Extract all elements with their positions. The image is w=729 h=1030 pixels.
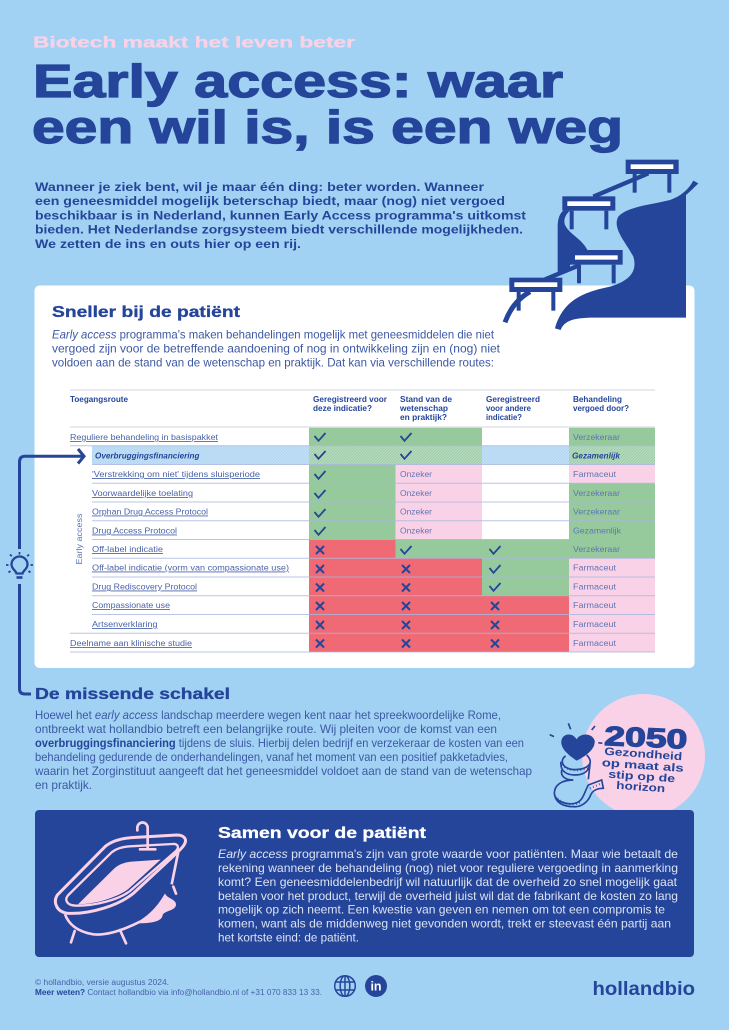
route names: Off-label indicatie (vorm van compassionate use) xyxy=(92,562,289,572)
intro text: bieden. Het Nederlandse zorgsysteem biedt verschillende mogelijkheden. xyxy=(35,222,523,236)
reimbursed-by labels: Verzekeraar xyxy=(573,506,620,516)
uncertain labels: Onzeker xyxy=(400,469,432,479)
footer text xyxy=(35,978,322,997)
footer text: Meer weten? Contact hollandbio via info@hollandbio.nl of +31 070 833 13 33. xyxy=(35,988,322,997)
reimbursed-by labels: Farmaceut xyxy=(573,562,617,572)
callout caption: stip op de xyxy=(608,769,676,785)
early access vertical label: Early access xyxy=(74,513,84,565)
icon: lightbulb xyxy=(6,552,33,578)
samen text: het kortste eind: de patiënt. xyxy=(218,932,359,944)
reimbursed-by labels: Gezamenlijk xyxy=(572,450,621,460)
reimbursed-by labels: Farmaceut xyxy=(573,582,617,592)
pink circle callout: 2050 xyxy=(582,694,705,817)
logo: hollandbio: hollandbio xyxy=(592,979,695,1000)
intro text: een geneesmiddel mogelijk beterschap biedt, maar (nog) niet vergoed xyxy=(35,194,505,208)
footer text: © hollandbio, versie augustus 2024. xyxy=(35,978,169,987)
panel intro text xyxy=(52,328,501,370)
table header: indicatie? xyxy=(486,412,522,422)
title xyxy=(32,55,623,153)
icon: heart with measuring tape xyxy=(550,723,603,807)
route names: Overbruggingsfinanciering xyxy=(95,450,200,460)
callout caption: Gezondheid xyxy=(604,746,683,763)
reimbursed-by labels: Verzekeraar xyxy=(573,432,620,442)
table header xyxy=(70,394,629,422)
route names: Artsenverklaring xyxy=(92,619,158,629)
uncertain labels: Onzeker xyxy=(400,488,432,498)
samen text: komen, want als de middenweg niet gevonden wordt, trekt er steevast één partij aan xyxy=(218,918,671,930)
missende schakel text: Hoewel het early access landschap meerdere wegen kent naar het spreekwoordelijke Rome, xyxy=(35,709,501,722)
route names: 'Verstrekking om niet' tijdens sluisperiode xyxy=(92,469,260,479)
panel intro text: Early access programma's maken behandelingen mogelijk met geneesmiddelen die niet xyxy=(52,328,495,342)
samen text: mogelijk op zich neemt. Een kwestie van geven en nemen om tot een compromis te xyxy=(218,904,665,916)
uncertain labels xyxy=(400,469,432,536)
samen text xyxy=(218,848,678,944)
icon: globe xyxy=(335,976,355,996)
samen text: betalen voor het product, terwijl de overheid juist wil dat de fabrikant de kosten zo lang xyxy=(218,890,678,903)
table header: Stand van de xyxy=(400,394,452,404)
arrow: link line to missende schakel xyxy=(20,584,31,694)
missende schakel text: en praktijk. xyxy=(35,779,92,792)
heading: sneller bij de patiënt: Sneller bij de patiënt xyxy=(52,304,240,321)
reimbursed-by labels: Farmaceut xyxy=(573,469,617,479)
samen text: komt? Een geneesmiddelenbedrijf wil natuurlijk dat de overheid zo snel mogelijk gaat xyxy=(218,876,678,889)
panel intro text: vergoed zijn voor de betreffende aandoening of nog in ontwikkeling zijn en (nog) niet xyxy=(52,342,501,356)
table header: Geregistreerd xyxy=(486,394,540,404)
missende schakel text: behandeling gedurende de onderhandelingen, vanaf het moment van een positief pakketadvies, xyxy=(35,751,508,764)
callout caption: op maat als xyxy=(601,757,684,775)
intro text: Wanneer je ziek bent, wil je maar één ding: beter worden. Wanneer xyxy=(35,180,484,194)
title: Early access: waar xyxy=(33,55,563,107)
panel intro text: voldoen aan de stand van de wetenschap en praktijk. Dat kan via verschillende routes: xyxy=(52,356,494,370)
arrow: link line to table row xyxy=(20,449,84,549)
table header: vergoed door? xyxy=(573,403,629,413)
missende schakel text: waarin het Zorginstituut aangeeft dat het geneesmiddel voldoet aan de stand van de wetenschap xyxy=(34,765,532,778)
samen text: Early access programma's zijn van grote waarde voor patiënten. Maar wie betaalt de xyxy=(218,848,678,861)
route names: Off-label indicatie xyxy=(92,544,163,554)
uncertain labels: Onzeker xyxy=(400,506,432,516)
route names xyxy=(70,432,289,648)
intro text: We zetten de ins en outs hier op een rij. xyxy=(35,237,301,251)
table grid lines xyxy=(70,390,655,652)
reimbursed-by labels: Farmaceut xyxy=(573,638,617,648)
route names: Drug Rediscovery Protocol xyxy=(92,582,197,592)
check marks xyxy=(314,433,500,591)
icon: stairs and winding road xyxy=(505,160,698,330)
table header: deze indicatie? xyxy=(313,403,372,413)
table header: Behandeling xyxy=(573,394,622,404)
title: een wil is, is een weg xyxy=(32,101,623,153)
route names: Compassionate use xyxy=(92,600,170,610)
reimbursed-by labels: Verzekeraar xyxy=(573,544,620,554)
panel: sneller bij de patiënt xyxy=(34,286,694,668)
reimbursed-by labels: Gezamenlijk xyxy=(573,526,622,536)
callout caption xyxy=(601,746,684,795)
missende schakel text: overbruggingsfinanciering tijdens de sluis. Hierbij delen bedrijf en verzekeraar de kosten van een xyxy=(35,737,524,750)
heading: de missende schakel: De missende schakel xyxy=(35,686,230,703)
reimbursed-by labels: Farmaceut xyxy=(573,600,617,610)
route names: Orphan Drug Access Protocol xyxy=(92,506,208,516)
missende schakel text xyxy=(34,709,532,792)
table header: wetenschap xyxy=(399,403,448,413)
eyebrow: Biotech maakt het leven beter xyxy=(33,34,355,52)
reimbursed-by labels xyxy=(572,432,622,648)
callout caption: horizon xyxy=(616,780,666,795)
intro text xyxy=(35,180,526,251)
icon: linkedin: in xyxy=(370,980,382,994)
intro text: beschikbaar is in Nederland, kunnen Early Access programma's uitkomst xyxy=(35,208,526,222)
cross marks xyxy=(316,546,499,648)
uncertain labels: Onzeker xyxy=(400,526,432,536)
table header: en praktijk? xyxy=(400,412,447,422)
route names: Reguliere behandeling in basispakket xyxy=(70,432,219,442)
samen text: rekening wanneer de behandeling (nog) niet voor reguliere vergoeding in aanmerking xyxy=(218,862,678,875)
route names: Voorwaardelijke toelating xyxy=(92,488,193,498)
missende schakel text: ontbreekt wat hollandbio betreft een belangrijke route. Wij pleiten voor de komst van een xyxy=(35,723,497,736)
icon: overflowing bathtub xyxy=(55,822,185,943)
table header: voor andere xyxy=(486,403,531,413)
access routes table xyxy=(70,390,655,652)
reimbursed-by labels: Verzekeraar xyxy=(573,488,620,498)
table header: Toegangsroute xyxy=(70,394,128,404)
route names: Drug Access Protocol xyxy=(92,526,177,536)
reimbursed-by labels: Farmaceut xyxy=(573,619,617,629)
table header: Geregistreerd voor xyxy=(313,394,388,404)
panel: samen voor de patiënt xyxy=(35,810,694,957)
route names: Deelname aan klinische studie xyxy=(70,638,192,648)
heading: samen voor de patiënt: Samen voor de patiënt xyxy=(218,825,426,842)
2050 number: 2050 xyxy=(604,721,688,755)
icon: linkedin xyxy=(365,975,387,997)
table cell fills xyxy=(92,427,655,652)
